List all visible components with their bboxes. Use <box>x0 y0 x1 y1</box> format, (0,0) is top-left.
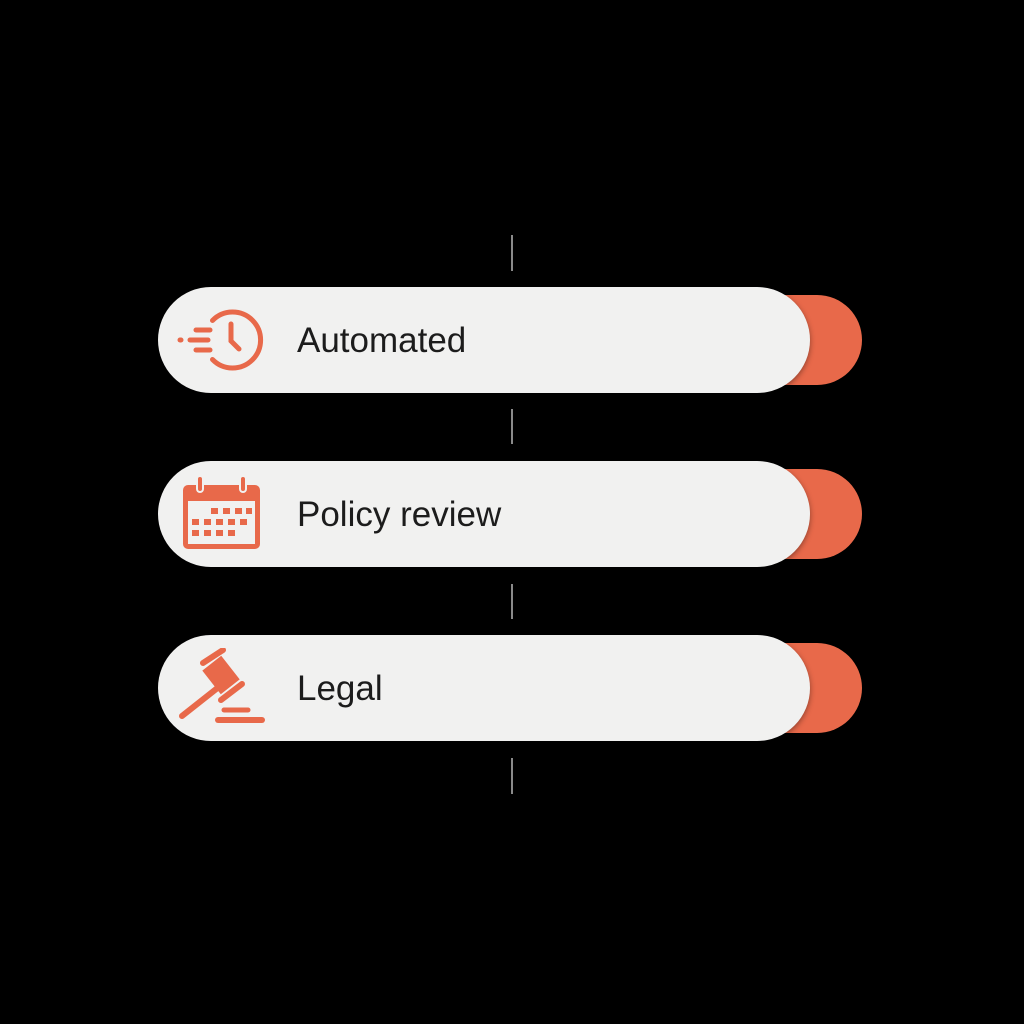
label: Legal <box>297 669 383 708</box>
icon: fast clock <box>178 310 264 370</box>
icon: calendar <box>183 477 260 549</box>
label: Automated <box>297 321 466 360</box>
row: Policy review <box>158 461 862 567</box>
row: Legal <box>158 635 862 741</box>
orange tab <box>768 469 862 559</box>
orange tab <box>768 643 862 733</box>
icon: gavel <box>179 648 265 723</box>
pill <box>158 287 810 393</box>
orange tab <box>768 295 862 385</box>
pill <box>158 461 810 567</box>
label: Policy review <box>297 495 501 534</box>
pill <box>158 635 810 741</box>
row: Automated <box>158 287 862 393</box>
